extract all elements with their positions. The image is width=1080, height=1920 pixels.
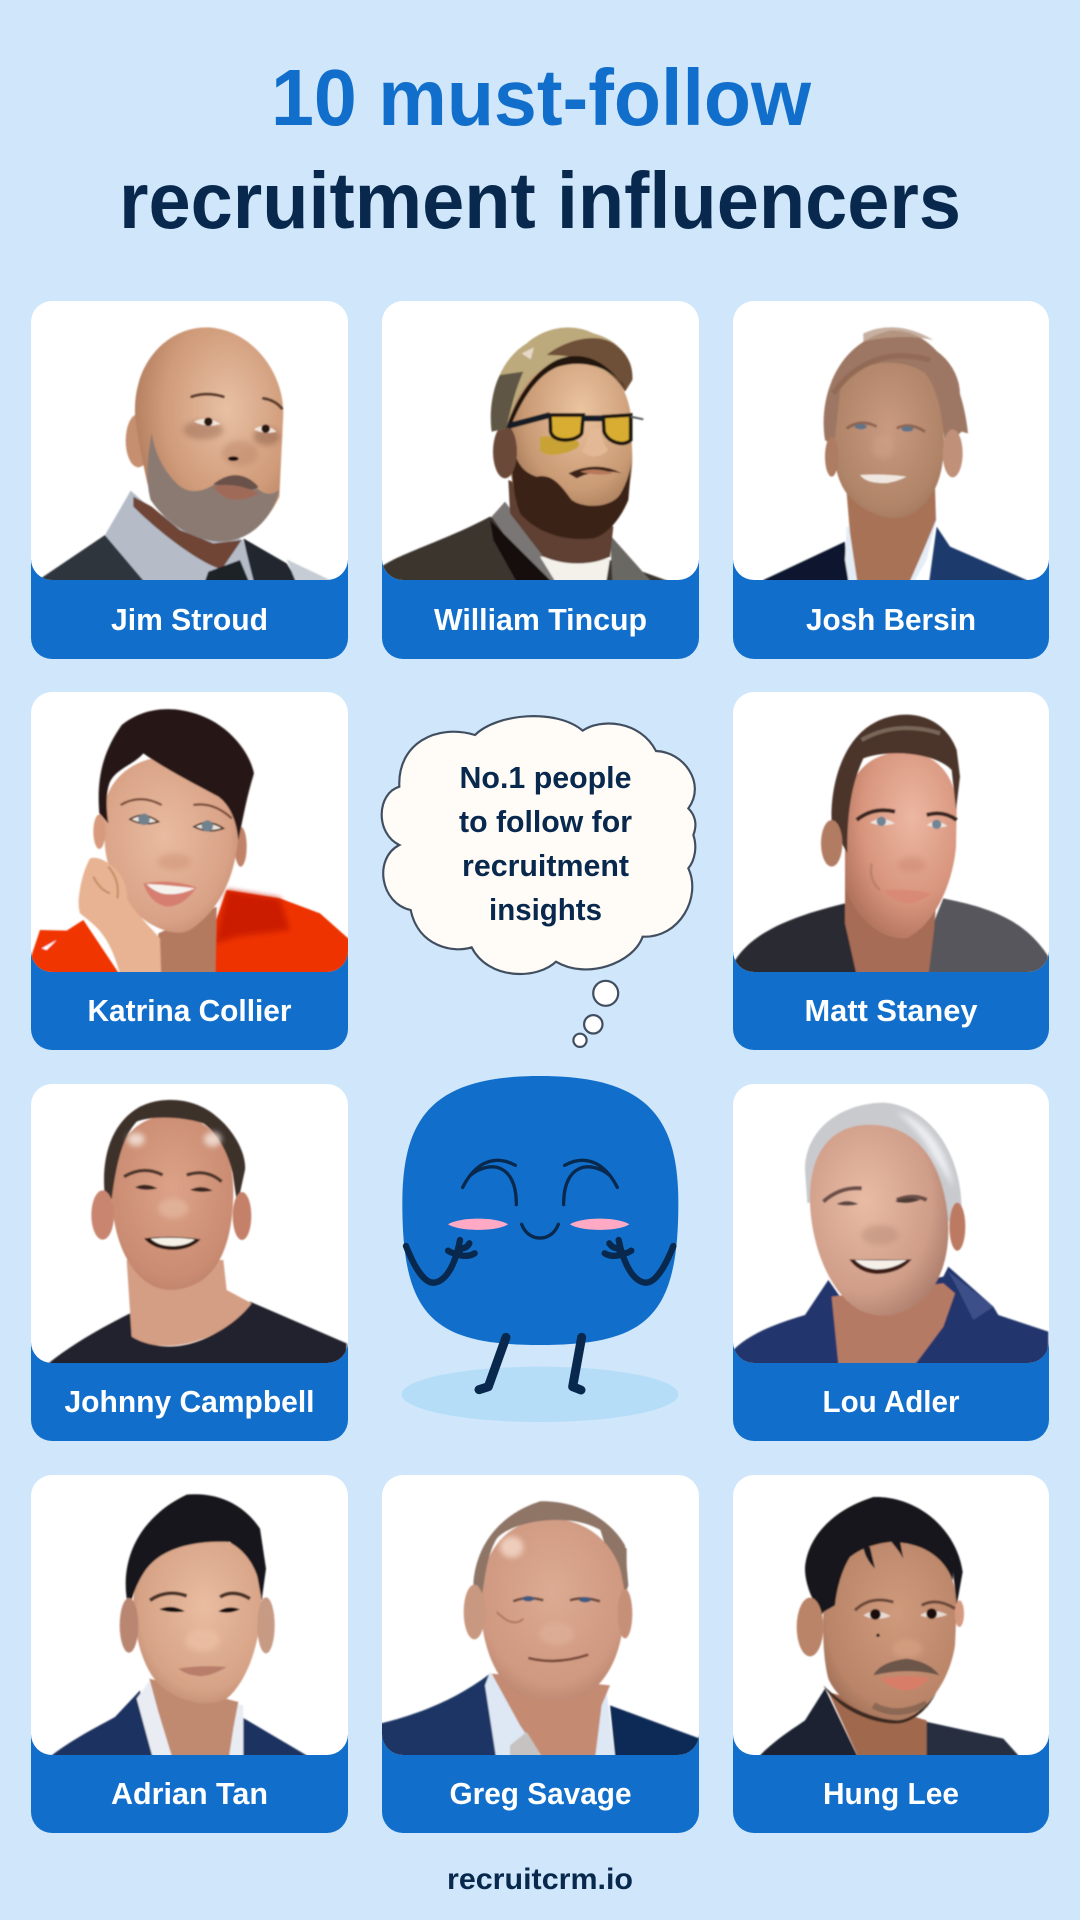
- name: Jim Stroud: Jim Stroud: [111, 602, 268, 637]
- card: Adrian Tan: [31, 1475, 348, 1833]
- bubble text: recruitment: [462, 848, 629, 883]
- photo: William Tincup: [382, 328, 670, 600]
- bubble text: insights: [489, 892, 602, 927]
- card: Hung Lee: [733, 1475, 1049, 1833]
- card: Matt Staney: [733, 692, 1049, 1050]
- name: Katrina Collier: Katrina Collier: [88, 993, 292, 1028]
- mascot: [402, 1076, 678, 1422]
- face: [463, 1160, 617, 1238]
- name: Adrian Tan: Adrian Tan: [111, 1776, 268, 1811]
- card: Johnny Campbell: [31, 1084, 348, 1441]
- bubble cloud: [382, 716, 695, 974]
- card: Katrina Collier: [30, 692, 350, 1050]
- name: Hung Lee: Hung Lee: [823, 1776, 959, 1811]
- body: [402, 1076, 678, 1345]
- photo: Lou Adler: [733, 1103, 1048, 1380]
- title: [119, 53, 961, 245]
- ground shadow: [402, 1367, 678, 1422]
- bubble text: [459, 760, 632, 927]
- title: recruitment influencers: [119, 156, 961, 245]
- name: Johnny Campbell: Johnny Campbell: [64, 1384, 314, 1419]
- name: William Tincup: William Tincup: [434, 602, 647, 637]
- photo: Johnny Campbell: [48, 1100, 347, 1380]
- photo: Matt Staney: [733, 715, 1048, 990]
- photo: Josh Bersin: [763, 327, 1027, 600]
- name: Greg Savage: Greg Savage: [450, 1776, 632, 1811]
- photo: Jim Stroud: [38, 327, 330, 600]
- name: Josh Bersin: Josh Bersin: [806, 602, 976, 637]
- small thought circles: [573, 981, 618, 1047]
- card: William Tincup: [382, 301, 699, 659]
- thought bubble: [382, 716, 695, 1047]
- cheeks: [448, 1219, 629, 1230]
- footer url: recruitcrm.io: [447, 1863, 633, 1896]
- title: 10 must-follow: [271, 53, 812, 142]
- card: Lou Adler: [733, 1084, 1049, 1441]
- card: Greg Savage: [380, 1475, 700, 1833]
- card: Jim Stroud: [31, 301, 348, 659]
- name: Matt Staney: Matt Staney: [804, 993, 978, 1028]
- bubble text: No.1 people: [460, 760, 632, 795]
- photo: Hung Lee: [760, 1497, 1018, 1772]
- name: Lou Adler: Lou Adler: [822, 1384, 960, 1419]
- bubble text: to follow for: [459, 804, 632, 839]
- photo: Adrian Tan: [52, 1494, 307, 1772]
- arms and hands: [406, 1240, 673, 1283]
- card: Josh Bersin: [733, 301, 1049, 659]
- photo: Katrina Collier: [30, 709, 350, 990]
- legs: [479, 1337, 582, 1390]
- photo: Greg Savage: [380, 1501, 700, 1772]
